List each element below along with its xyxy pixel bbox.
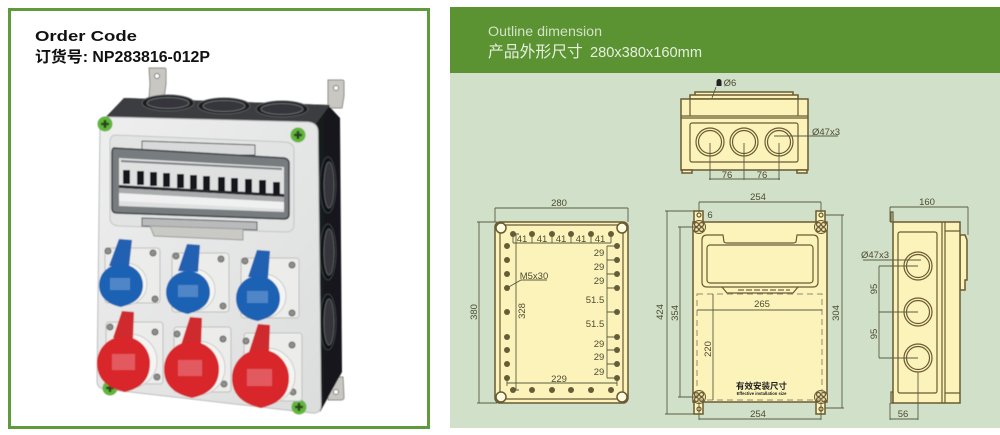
drawing: back view: 29 xyxy=(594,352,604,363)
socket: red 1 xyxy=(97,311,157,392)
drawing: side view: 160 xyxy=(919,197,935,208)
socket: blue 2 xyxy=(166,244,215,314)
drawing: front view: 254 xyxy=(750,409,766,420)
drawing: back view: 29 xyxy=(594,262,604,273)
bracket holes xyxy=(154,74,338,394)
socket: red 2 xyxy=(164,317,225,398)
header band: Outline dimension xyxy=(488,23,602,39)
breaker window xyxy=(110,135,294,240)
drawing: side view: 95 xyxy=(869,329,880,339)
drawing: back view: M5x30 xyxy=(520,271,548,282)
socket plates xyxy=(105,248,302,401)
drawing: top elevation: Ø6 xyxy=(724,78,736,89)
corner screws xyxy=(98,116,306,414)
drawing: back view: 41 xyxy=(537,234,547,245)
drawing: back view: 51.5 xyxy=(586,319,604,330)
drawing: front view: 424 xyxy=(655,304,666,320)
drawing: side view: 95 xyxy=(869,284,880,294)
drawing: back view: 280 xyxy=(551,198,567,209)
drawing: front view: 265 xyxy=(754,299,770,310)
drawing: back view: 29 xyxy=(594,276,604,287)
plate bolts xyxy=(105,248,296,395)
title: order code xyxy=(35,28,210,66)
drawing: top elevation xyxy=(681,78,840,181)
socket: blue 1 xyxy=(99,239,147,307)
drawing: back view xyxy=(469,198,628,403)
drawing: side view xyxy=(861,197,968,420)
drawing: back view: 41 xyxy=(595,234,605,245)
drawing: back view: 29 xyxy=(594,339,604,350)
socket: blue 3 xyxy=(236,250,286,321)
top cable glands xyxy=(142,95,308,117)
drawing: front view: Effective installation size xyxy=(737,391,787,396)
drawing: back view: 51.5 xyxy=(586,295,604,306)
socket: red 3 xyxy=(232,324,295,408)
drawing: front view xyxy=(655,192,844,420)
drawing: front view: 6 xyxy=(707,210,713,221)
grey cover face xyxy=(97,117,321,413)
drawing: back view: 380 xyxy=(469,304,480,320)
drawing: front view: 354 xyxy=(670,305,681,321)
panel: product photo xyxy=(10,10,428,428)
drawing: back view: 41 xyxy=(576,234,586,245)
dark enclosure body xyxy=(100,98,342,412)
title: order code: 订货号: NP283816-012P xyxy=(35,47,210,66)
side cable glands xyxy=(320,157,336,350)
drawing: side view: Ø47x3 xyxy=(861,250,889,261)
drawing: top elevation: 76 xyxy=(722,170,732,181)
drawing: back view: 328 xyxy=(517,303,528,319)
drawing: back view: 29 xyxy=(594,367,604,378)
drawing: front view: 220 xyxy=(703,341,714,357)
drawing: side view: 56 xyxy=(898,409,908,420)
header band: 产品外形尺寸 xyxy=(488,43,583,61)
mounting brackets xyxy=(149,68,344,400)
drawing: top elevation: 76 xyxy=(757,170,767,181)
icon: padlock xyxy=(716,79,722,86)
header band xyxy=(450,7,1000,73)
breaker window outline xyxy=(702,235,818,287)
drawing: back view: 229 xyxy=(551,374,567,385)
drawing: front view: 有效安装尺寸 xyxy=(736,381,787,391)
panel: outline dimension xyxy=(450,7,1000,428)
drawing: back view: 29 xyxy=(594,248,604,259)
drawing: front view: 254 xyxy=(750,192,766,203)
drawing: back view: 41 xyxy=(517,234,527,245)
title: order code: Order Code xyxy=(35,28,137,45)
drawing: back view: 41 xyxy=(556,234,566,245)
mounting holes xyxy=(504,231,620,393)
drawing: top elevation: Ø47x3 xyxy=(812,127,840,138)
header band: 280x380x160mm xyxy=(590,44,702,61)
product: distribution box xyxy=(97,68,344,414)
drawing: front view: 304 xyxy=(831,305,842,321)
